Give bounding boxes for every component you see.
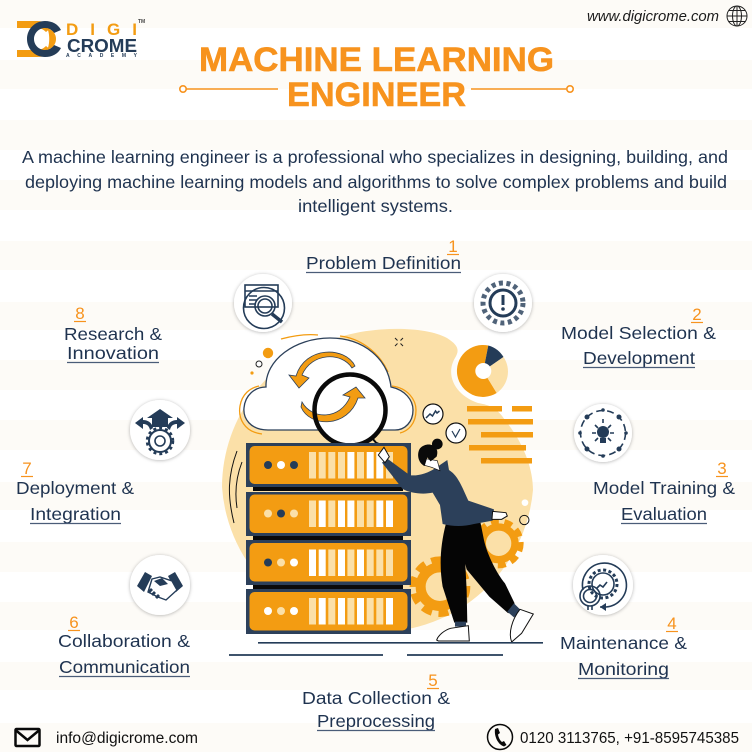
icon: handshake [130,555,190,615]
socks [455,603,521,627]
cloud [240,335,416,434]
step 7: deployment and integration: 7 [22,459,32,478]
step 4: maintenance and monitoring: Monitoring [578,659,669,679]
icon: deployment arrows gear [130,400,190,460]
step 8: research and innovation: Research & [64,324,162,344]
icon: gear alert [474,274,532,332]
step 5: data collection and preprocessing: Data Collection & [302,688,450,708]
icon: light bulb network [574,404,632,462]
server 2 bars [309,500,393,527]
step 3: model training and evaluation: Model Training & [593,478,735,498]
logo: Digicrome Academy: ACADEMY [66,53,138,59]
step 2: model selection and development: Model Selection & [561,323,716,343]
website url: www.digicrome.com [587,9,719,25]
pie chart [457,345,508,397]
step 8: research and innovation [64,304,162,363]
server rack [246,443,411,634]
step 2: model selection and development [561,305,716,368]
server 1 lights [264,461,298,469]
face and hair [423,458,440,471]
server 4 bars [309,598,393,624]
intro paragraph [22,147,728,216]
step 2: model selection and development: Development [583,348,695,368]
step 2: model selection and development: 2 [692,305,702,324]
step 4: maintenance and monitoring [560,614,687,679]
title: MACHINE LEARNING [199,41,554,79]
step 6: collaboration and communication: Communication [59,657,190,677]
step 6: collaboration and communication: 6 [69,613,79,632]
step 4: maintenance and monitoring: 4 [667,614,677,633]
background blob [222,329,533,632]
step 3: model training and evaluation [593,459,735,524]
step 1: problem definition: 1 [448,237,458,256]
server 3 bars [309,550,393,576]
step 4: maintenance and monitoring: Maintenance & [560,633,687,653]
gears [413,521,521,613]
server 2 lights [264,510,298,518]
server 3 lights [264,558,298,566]
sweater [382,459,494,526]
floating dots [522,499,528,506]
hands [378,447,507,519]
title: ENGINEER [287,76,466,114]
logo: Digicrome Academy: CROME [67,36,137,56]
step 1: problem definition: Problem Definition [306,253,461,273]
intro paragraph: A machine learning engineer is a professional who specializes in designing, building, and [22,147,728,167]
step 3: model training and evaluation: Evaluation [621,504,707,524]
step 5: data collection and preprocessing: 5 [428,671,438,690]
icon: globe [727,6,747,26]
icon: browser magnifier [234,274,292,332]
person [378,439,533,642]
central illustration [222,329,543,655]
text lines chart [467,406,533,464]
logo: Digicrome Academy: TM [138,19,145,25]
step 7: deployment and integration: Deployment & [16,478,134,498]
step 7: deployment and integration: Integration [30,504,121,524]
step 8: research and innovation: 8 [75,304,85,323]
icon: phone [488,724,512,750]
step 5: data collection and preprocessing [302,671,450,731]
step 6: collaboration and communication [58,613,190,677]
badge: trend [423,404,443,424]
pants [441,520,515,623]
ground lines [229,643,543,655]
step 1: problem definition [306,237,461,273]
step 7: deployment and integration [16,459,134,524]
step 8: research and innovation: Innovation [67,343,159,363]
intro paragraph: deploying machine learning models and algorithms to solve complex problems and build [25,172,727,192]
step 6: collaboration and communication: Collaboration & [58,631,190,651]
phone numbers: 0120 3113765, +91-8595745385 [520,730,739,747]
motion marks [229,451,242,523]
shoes [437,609,533,642]
title [199,41,554,114]
badge: check [446,423,466,443]
sync arrows [289,352,365,422]
logo: Digicrome Academy [17,19,145,59]
intro paragraph: intelligent systems. [298,196,453,216]
icon: mail [16,729,40,746]
title rules [180,86,573,92]
icon: maintenance gear magnifier [573,555,633,615]
logo: Digicrome Academy: DIGI [66,20,137,39]
magnifier lens [314,374,386,446]
decorative dots and sparkle [263,348,273,358]
server 4 lights [264,607,298,615]
email address: info@digicrome.com [56,730,198,747]
server 1 bars [309,452,393,478]
step 5: data collection and preprocessing: Preprocessing [317,711,435,731]
step 3: model training and evaluation: 3 [717,459,727,478]
magnifier ring and handle [314,374,386,456]
